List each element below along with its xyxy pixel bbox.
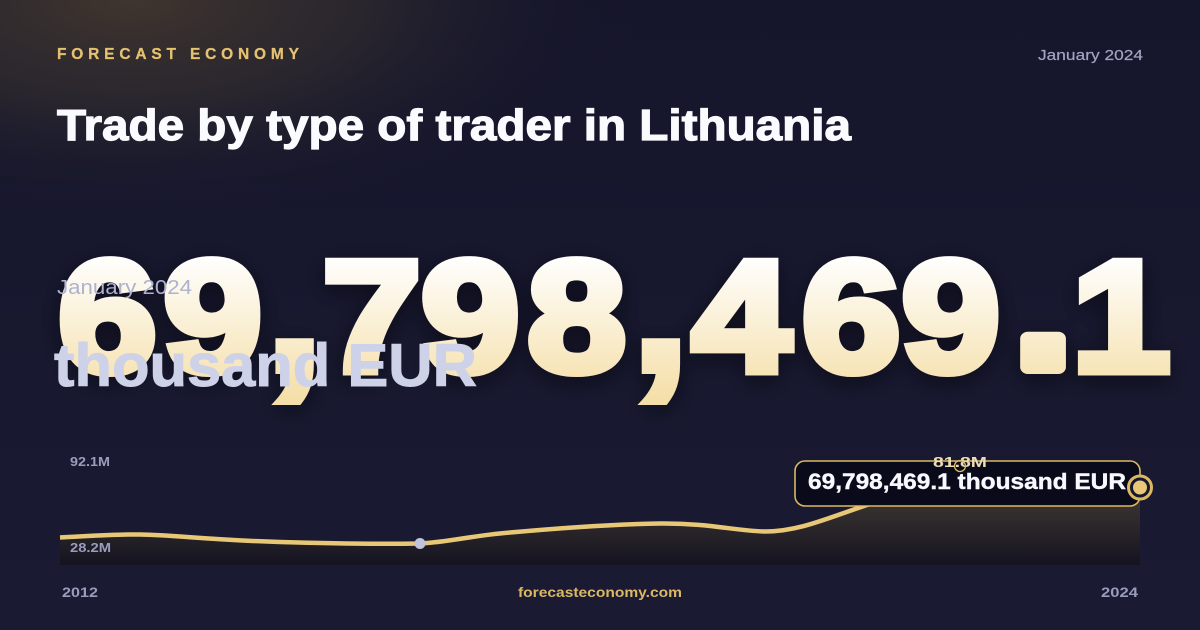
peak marker — [954, 460, 966, 472]
trend line — [60, 465, 1140, 544]
y axis max label: 92.1M — [70, 454, 110, 469]
area fill — [60, 465, 1140, 565]
website: forecasteconomy.com — [518, 584, 682, 600]
latest point marker — [1128, 476, 1152, 499]
low point marker — [414, 538, 426, 549]
end year: 2024 — [1101, 584, 1138, 600]
callout box — [795, 461, 1140, 506]
peak label: 81.8M — [933, 454, 987, 471]
big value: 69,798,469 — [58, 190, 1000, 413]
big value: 1 — [1072, 228, 1170, 405]
brand label: FORECAST ECONOMY — [57, 46, 300, 63]
value date overlay: January 2024 — [57, 277, 192, 299]
line chart — [60, 454, 1152, 565]
big value: . — [1014, 195, 1073, 408]
start year: 2012 — [62, 584, 98, 600]
unit label: thousand EUR — [54, 332, 477, 399]
callout text: 69,798,469.1 thousand EUR — [808, 469, 1126, 494]
title: Trade by type of trader in Lithuania — [57, 101, 852, 150]
date top right: January 2024 — [1038, 47, 1143, 64]
y axis min label: 28.2M — [70, 540, 111, 555]
